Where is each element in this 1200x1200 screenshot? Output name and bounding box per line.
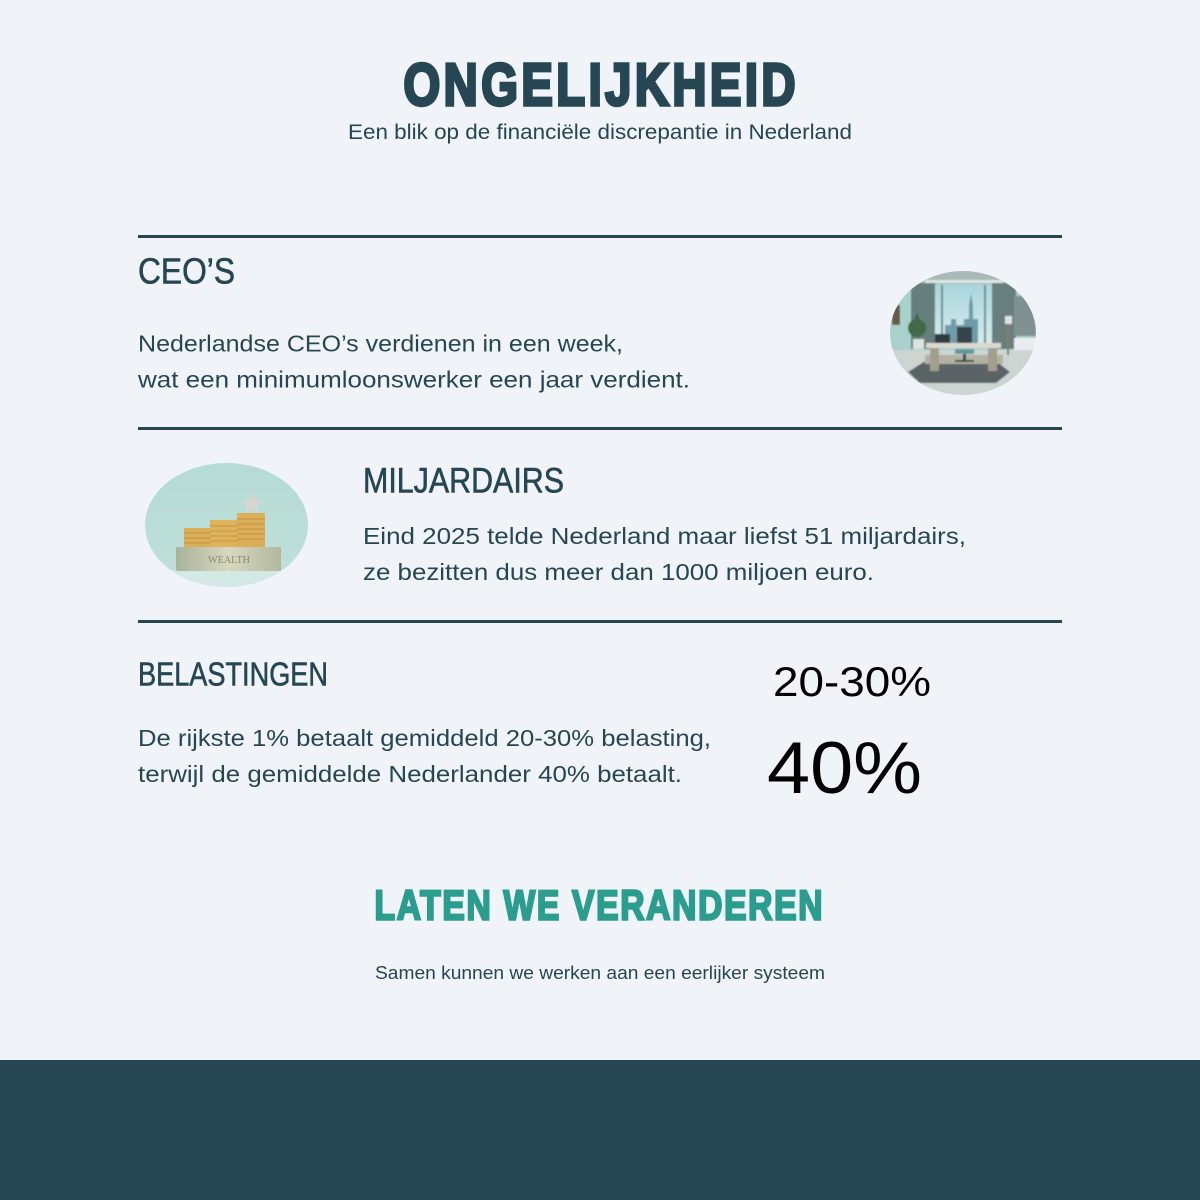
- text block: miljardairs: Eind 2025 telde Nederland maar liefst 51 miljardairs,: [363, 523, 966, 549]
- footer band: [0, 1060, 1200, 1200]
- text block: belastingen: De rijkste 1% betaalt gemiddeld 20-30% belasting,: [138, 725, 711, 751]
- title: ONGELIJKHEID: [404, 53, 796, 118]
- number: 40%: 40%: [767, 728, 922, 809]
- text block: miljardairs: ze bezitten dus meer dan 1000 miljoen euro.: [363, 559, 874, 585]
- heading: belastingen: BELASTINGEN: [138, 656, 328, 692]
- heading: miljardairs: MILJARDAIRS: [363, 462, 564, 500]
- image: coin stacks on wealth block: WEALTH: [208, 554, 250, 566]
- text block: CEO's: Nederlandse CEO’s verdienen in een week,: [138, 330, 623, 356]
- image: office with skyline view: [890, 271, 1036, 395]
- image: coin stacks on wealth block: [145, 463, 308, 587]
- call to action heading: LATEN WE VERANDEREN: [374, 883, 823, 929]
- panel: belastingen: [138, 620, 1062, 809]
- panel: miljardairs: [138, 427, 1062, 587]
- text block: CEO's: wat een minimumloonswerker een jaar verdient.: [137, 366, 690, 392]
- text block: belastingen: terwijl de gemiddelde Nederlander 40% betaalt.: [138, 761, 682, 787]
- text block: miljardairs: [363, 523, 966, 585]
- subtitle: Een blik op de financiële discrepantie in Nederland: [348, 121, 852, 144]
- text block: belastingen: [138, 725, 711, 787]
- call to action text: Samen kunnen we werken aan een eerlijker systeem: [375, 963, 825, 983]
- text block: CEO's: [137, 330, 690, 392]
- number: 20-30%: 20-30%: [773, 658, 931, 705]
- panel: CEO's: [137, 235, 1062, 400]
- heading: CEO's: CEO’S: [138, 250, 235, 292]
